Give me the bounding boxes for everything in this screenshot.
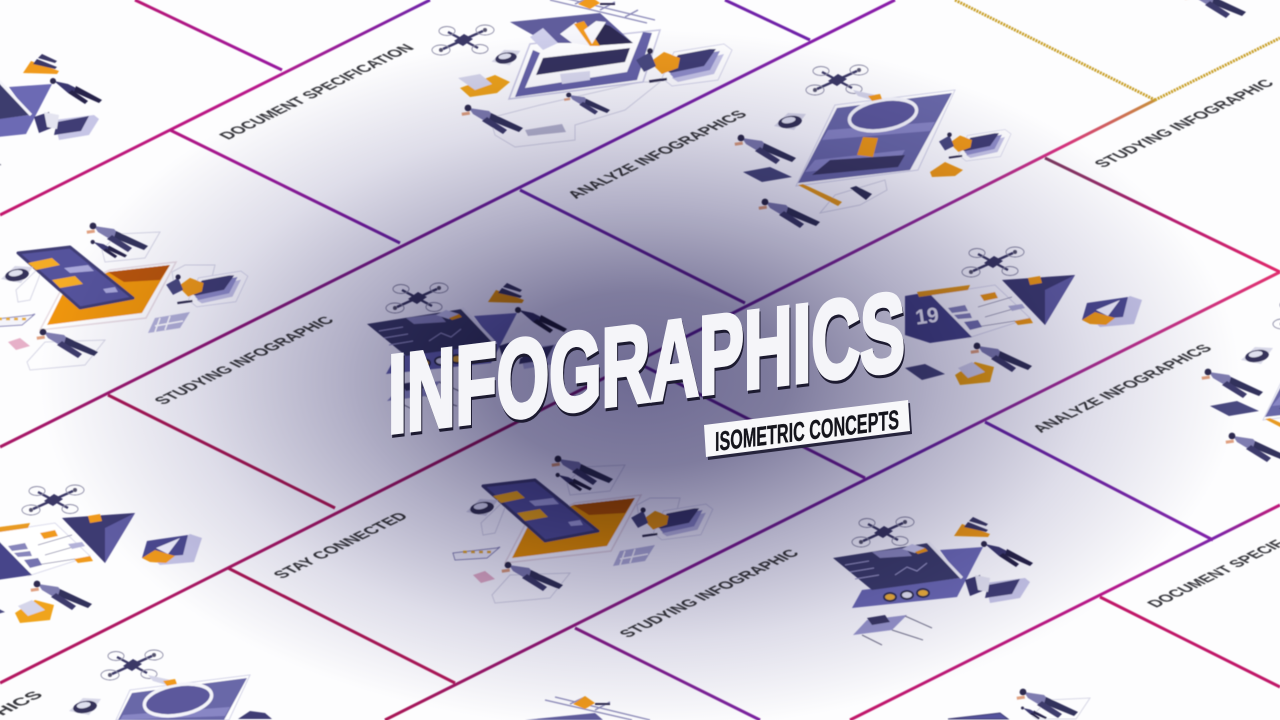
illustration: calendar and triangle: [905, 247, 1142, 385]
title: INFOGRAPHICS: [389, 271, 906, 460]
panel label: analyze infographics right: ANALYZE INFOGRAPHICS: [1028, 342, 1216, 435]
illustration: analyze infographics, right copy: [1202, 299, 1280, 462]
illustration: studying laptop, top-left copy: [0, 54, 102, 182]
illustration: studying laptop: [833, 517, 1033, 645]
panel label: analyze infographics: ANALYZE INFOGRAPHICS: [563, 108, 751, 201]
panel label: stay connected: STAY CONNECTED: [269, 510, 412, 581]
illustration: stay connected phone: [453, 456, 713, 603]
calendar number: 19: [914, 304, 940, 330]
subtitle badge: [704, 400, 912, 460]
person, top right corner: [1185, 0, 1246, 18]
illustration: studying laptop, centre copy: [367, 283, 567, 411]
illustration: analyze infographics: [735, 65, 1011, 228]
panel label: document specification: DOCUMENT SPECIFICATION: [215, 42, 418, 142]
illustration: phone, left: [0, 223, 248, 370]
title: [388, 268, 906, 460]
panel label: studying infographic left: STUDYING INFOGRAPHIC: [150, 314, 339, 407]
illustration: analyze infographics, bottom-left fragment: [69, 650, 272, 720]
illustration: calendar and triangle, left copy: [0, 485, 202, 623]
illustration: document specification, bottom fragment: [525, 696, 650, 720]
subtitle badge: ISOMETRIC CONCEPTS: [715, 404, 899, 457]
panel label: studying infographic bottom: STUDYING INFOGRAPHIC: [615, 547, 804, 640]
illustration: phone, bottom-right fragment: [948, 689, 1090, 720]
illustration: document specification: [432, 0, 732, 147]
title: INFOGRAPHICS: [388, 268, 905, 457]
